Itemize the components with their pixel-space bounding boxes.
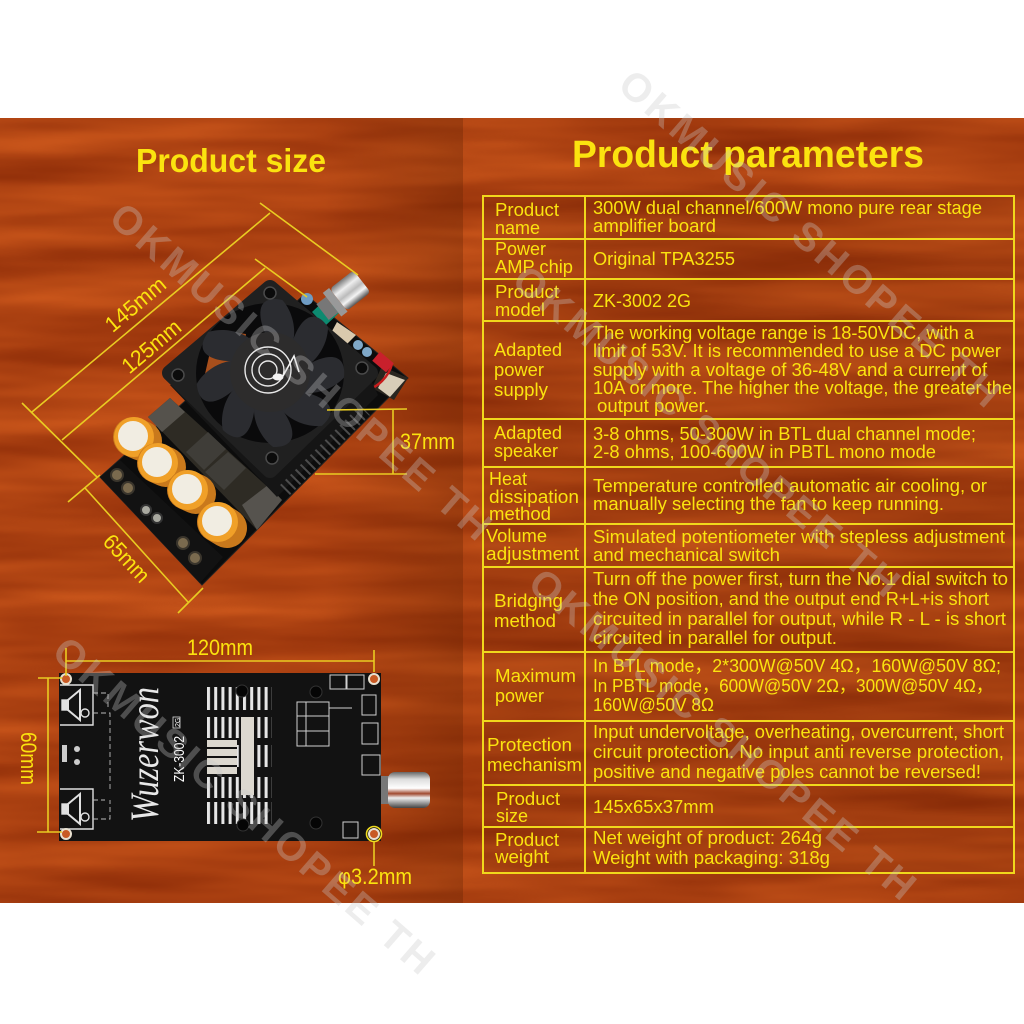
row: power amp chip: [495, 238, 735, 277]
row: product weight: Product: [495, 829, 559, 850]
heading: product size: Product size: [136, 142, 326, 179]
row: product name: [495, 197, 982, 238]
row: volume adjustment: [486, 525, 1005, 565]
row: product model: model: [495, 299, 545, 320]
row: adapted power supply: The working voltage range is 18-50VDC, with a: [593, 322, 975, 343]
row: maximum power: Maximum: [495, 665, 576, 686]
connector outlines: [330, 675, 380, 838]
row: bridging method: Bridging: [494, 590, 563, 611]
row: maximum power: In PBTL mode，600W@50V 2Ω，300W@50V 4Ω，: [593, 675, 993, 696]
model 2G badge: [173, 717, 182, 728]
row: heat dissipation method: dissipation: [489, 486, 579, 507]
speaker icon bottom: [60, 789, 93, 829]
fan hub with logo: [230, 332, 310, 412]
row: adapted speaker: 3-8 ohms, 50-300W in BTL dual channel mode;: [593, 423, 976, 444]
row: product name: name: [495, 217, 540, 238]
row: volume adjustment: Volume: [486, 525, 547, 546]
row: protection mechanism: Protection: [487, 734, 572, 755]
row: bridging method: circuited in parallel for output.: [593, 627, 837, 648]
panel: wood background left: [0, 118, 463, 903]
row: protection mechanism: circuit protection. No input anti reverse protection,: [593, 741, 1004, 762]
photo: amplifier board perspective view: [100, 269, 408, 585]
row: product weight: Weight with packaging: 318g: [593, 847, 830, 868]
dimension: 65mm: [68, 475, 203, 613]
watermarks: OKMUSIC SHOPEE TH: [520, 560, 924, 909]
row: adapted power supply: limit of 53V. It is recommended to use a DC power: [593, 340, 1001, 361]
row: product name: 300W dual channel/600W mono pure rear stage: [593, 197, 982, 218]
row: heat dissipation method: Temperature controlled automatic air cooling, or: [593, 475, 987, 496]
row: adapted power supply: 10A or more. The higher the voltage, the greater the: [593, 377, 1012, 398]
row: product weight: weight: [494, 846, 549, 867]
row: product model: ZK-3002 2G: [593, 290, 691, 311]
pcb board: [100, 294, 408, 585]
row: volume adjustment: adjustment: [486, 543, 579, 564]
connector and component edge: [301, 293, 408, 400]
dimension: 37mm: 37mm: [400, 429, 455, 454]
fan housing: [170, 288, 370, 470]
heat pad vents: [207, 687, 272, 824]
inductors: [148, 398, 282, 530]
row: protection mechanism: positive and negative poles cannot be reversed!: [593, 761, 981, 782]
row: product name: amplifier board: [593, 215, 716, 236]
row: adapted power supply: output power.: [597, 395, 709, 416]
row: heat dissipation method: [489, 468, 987, 524]
row: heat dissipation method: manually selecting the fan to keep running.: [593, 493, 944, 514]
row: product size: Product: [496, 788, 560, 809]
row: maximum power: [495, 655, 1001, 715]
row: volume adjustment: and mechanical switch: [593, 544, 780, 565]
row: adapted speaker: [494, 422, 976, 462]
row: adapted speaker: 2-8 ohms, 100-600W in PBTL mono mode: [593, 441, 936, 462]
terminal strip: [100, 460, 223, 583]
row: power amp chip: Power: [495, 238, 546, 259]
row: volume adjustment: Simulated potentiometer with stepless adjustment: [593, 526, 1005, 547]
row: bridging method: Turn off the power first, turn the No.1 dial switch to: [593, 568, 1008, 589]
row: bridging method: [494, 568, 1008, 648]
row: adapted power supply: supply with a voltage of 36-48V and a current of: [593, 359, 988, 380]
dimension: 37mm: [315, 409, 455, 474]
row: adapted power supply: [494, 322, 1012, 416]
model 2G badge: 2G: [175, 718, 182, 727]
row: adapted power supply: power: [494, 359, 544, 380]
bridge markings: [93, 693, 110, 819]
heatsink: [170, 378, 378, 497]
heading: product parameters: Product parameters: [572, 134, 924, 176]
pcb: [59, 673, 381, 841]
knob: [381, 772, 430, 808]
row: product weight: Net weight of product: 264g: [593, 827, 822, 848]
row: product model: Product: [495, 281, 559, 302]
row: product size: [496, 788, 714, 826]
dimension: 60mm: [16, 678, 62, 832]
row: protection mechanism: mechanism: [487, 754, 582, 775]
row: maximum power: 160W@50V 8Ω: [593, 694, 714, 715]
model text: ZK-3002: [171, 736, 188, 782]
watermarks: OKMUSIC SHOPEE TH: [610, 62, 1009, 416]
speaker icon top: [60, 685, 93, 725]
table: product parameters: [483, 196, 1014, 873]
dimension: 125mm: 125mm: [116, 314, 186, 378]
knob: [313, 269, 371, 324]
dimension: 125mm: [62, 259, 307, 440]
row: maximum power: In BTL mode，2*300W@50V 4Ω，160W@50V 8Ω;: [593, 655, 1001, 676]
row: bridging method: method: [494, 610, 556, 631]
dimension: 120mm: [66, 635, 374, 676]
row: protection mechanism: [487, 721, 1004, 782]
mounting holes: [61, 674, 379, 839]
watermarks: OKMUSIC SHOPEE TH: [101, 195, 500, 549]
row: adapted power supply: Adapted: [494, 339, 562, 360]
photo: amplifier board underside: [59, 673, 430, 841]
row: heat dissipation method: Heat: [489, 468, 527, 489]
dimension: 65mm: 65mm: [98, 529, 155, 588]
dimension: 145mm: 145mm: [100, 272, 171, 337]
heat pad blocks: [207, 717, 254, 795]
bridge terminal marks: [62, 745, 80, 765]
panel: wood background right: [463, 118, 1024, 903]
row: product name: Product: [495, 199, 559, 220]
watermarks: OKMUSIC SHOPEE TH: [504, 257, 908, 606]
row: adapted power supply: supply: [494, 379, 549, 400]
row: adapted speaker: Adapted: [494, 422, 562, 443]
row: product size: size: [496, 805, 528, 826]
row: product size: 145x65x37mm: [593, 796, 714, 817]
dimension: hole diameter: [338, 826, 412, 889]
row: adapted speaker: speaker: [494, 440, 558, 461]
row: power amp chip: AMP chip: [495, 256, 573, 277]
row: power amp chip: Original TPA3255: [593, 248, 735, 269]
row: product weight: [494, 827, 830, 868]
standoffs: [236, 685, 322, 831]
watermarks: OKMUSIC SHOPEE TH: [44, 629, 443, 983]
logo text: Wuzerwon: [122, 687, 167, 822]
legend box: [297, 702, 352, 746]
table grid: [483, 196, 1014, 873]
fan screws: [172, 287, 368, 464]
row: protection mechanism: Input undervoltage, overheating, overcurrent, short: [593, 721, 1004, 742]
row: bridging method: circuited in parallel for output, while R - L - is short: [593, 608, 1006, 629]
row: product model: [495, 281, 691, 320]
dimension: hole diameter: φ3.2mm: [338, 864, 412, 889]
dimension: 120mm: 120mm: [187, 635, 253, 660]
fan blades: [192, 292, 351, 453]
dimension: 145mm: [22, 203, 358, 477]
orange gaps between blades: [205, 332, 246, 374]
row: heat dissipation method: method: [489, 503, 551, 524]
row: maximum power: power: [495, 685, 544, 706]
capacitors: [114, 417, 238, 542]
fan opening: [196, 303, 344, 443]
row: bridging method: the ON position, and the output end R+L+is short: [593, 588, 989, 609]
dimension: 60mm: 60mm: [16, 732, 41, 785]
